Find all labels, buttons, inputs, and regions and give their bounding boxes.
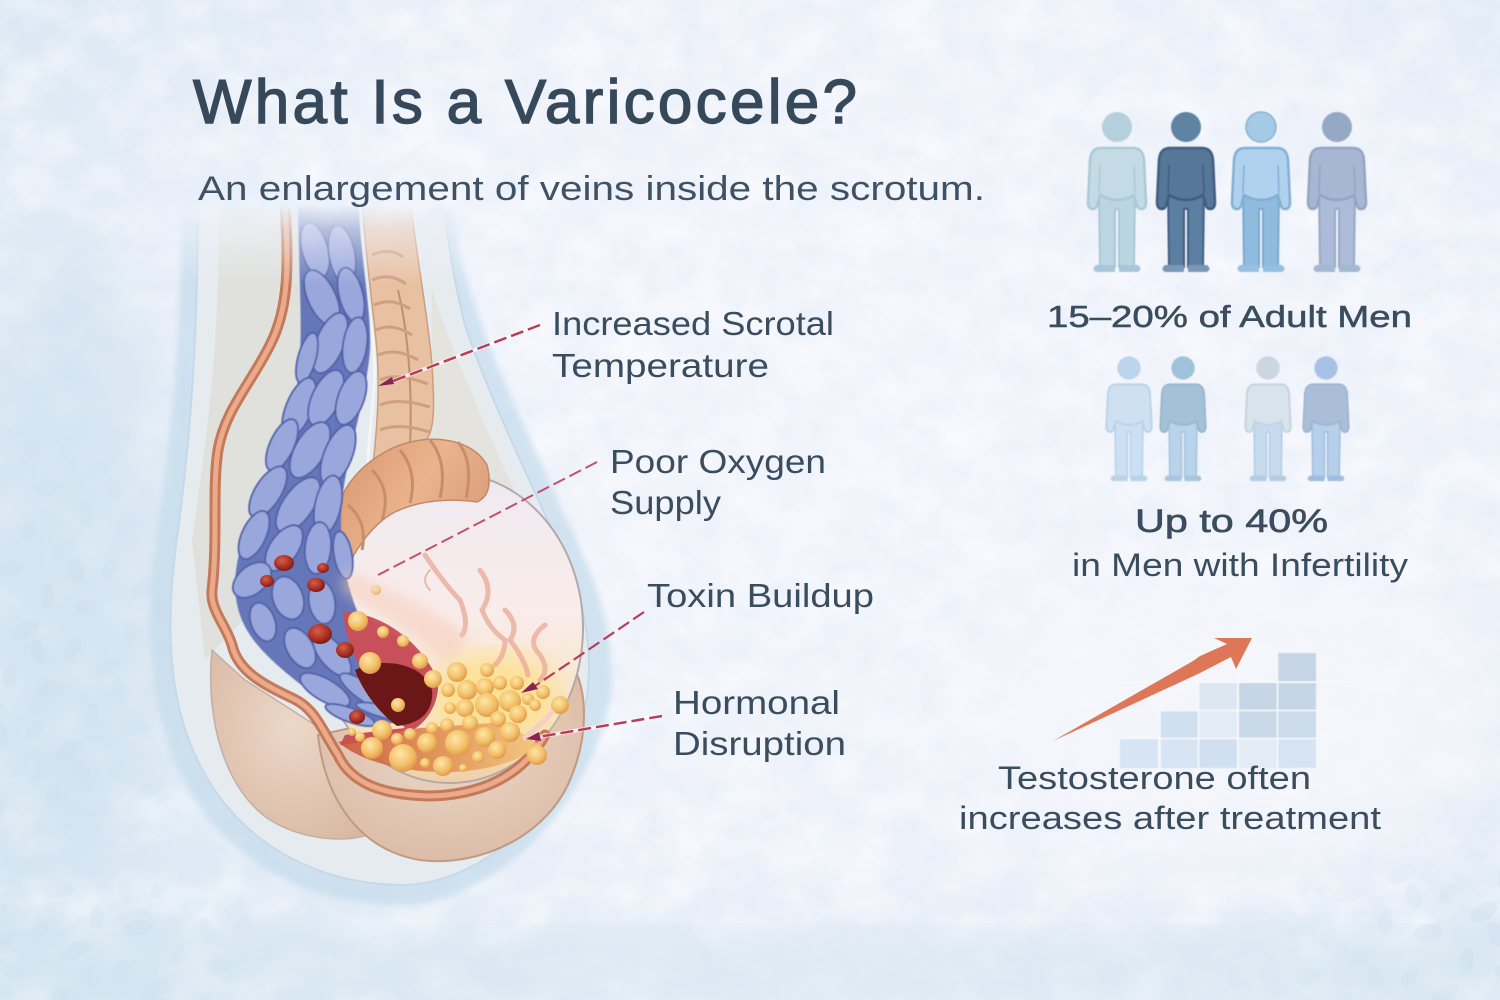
stat: up to 40%: Up to 40% [1135, 503, 1328, 539]
dilated veins [231, 208, 394, 728]
stat: 15-20% of adult men: 15–20% of Adult Men [1047, 299, 1412, 334]
label: toxin buildup: Toxin Buildup [647, 577, 874, 614]
leader: toxin [521, 612, 644, 693]
label: increased scrotal temperature: Increased Scrotal [552, 305, 834, 342]
outer sheath [150, 180, 611, 905]
person 4 [1308, 112, 1366, 272]
person 3 [1232, 112, 1290, 272]
label: hormonal disruption: Disruption [673, 725, 846, 762]
title: What Is a Varicocele? [193, 68, 857, 137]
label: increased scrotal temperature [552, 305, 834, 384]
caption: testosterone [959, 760, 1381, 836]
yellow toxin spheres [348, 585, 569, 776]
caption: testosterone: Testosterone often [998, 760, 1311, 796]
stat: in men with infertility: in Men with Infertility [1072, 547, 1408, 583]
label: increased scrotal temperature: Temperature [552, 347, 769, 384]
subtitle: An enlargement of veins inside the scrotum. [198, 170, 985, 208]
label: poor oxygen supply: Poor Oxygen [610, 443, 826, 480]
testis [342, 479, 584, 784]
label: hormonal disruption: Hormonal [673, 684, 840, 721]
label: hormonal disruption [673, 684, 846, 762]
person 3 [1245, 356, 1291, 481]
people row: 15-20% of adult men [1088, 112, 1366, 272]
blood pool [338, 570, 540, 772]
epididymis [340, 438, 490, 558]
sheath line along vas [365, 276, 376, 464]
caption: testosterone: increases after treatment [959, 800, 1381, 836]
red clots [260, 555, 365, 724]
left tan lump [211, 650, 375, 839]
people row: infertility [1106, 356, 1349, 481]
right tan sac [318, 670, 584, 861]
testis warm glow [433, 653, 557, 737]
artery highlight [212, 190, 545, 796]
person 4 [1303, 356, 1349, 481]
testosterone chart [1053, 638, 1350, 768]
leader: hormonal [526, 716, 662, 741]
person 1 [1106, 356, 1152, 481]
anatomy illustration [150, 180, 611, 905]
grid cells [1100, 653, 1350, 768]
growth arrow [1053, 638, 1252, 741]
heat waves [425, 555, 545, 680]
label: poor oxygen supply [610, 443, 826, 521]
vas deferens [362, 200, 434, 465]
leader: oxygen [378, 462, 597, 575]
person 2 [1160, 356, 1206, 481]
person 2 [1157, 112, 1215, 272]
inner sac stroke [525, 712, 552, 738]
label: poor oxygen supply: Supply [610, 484, 722, 521]
artery [212, 190, 545, 796]
leader: increased temperature [378, 325, 540, 386]
person 1 [1088, 112, 1146, 272]
